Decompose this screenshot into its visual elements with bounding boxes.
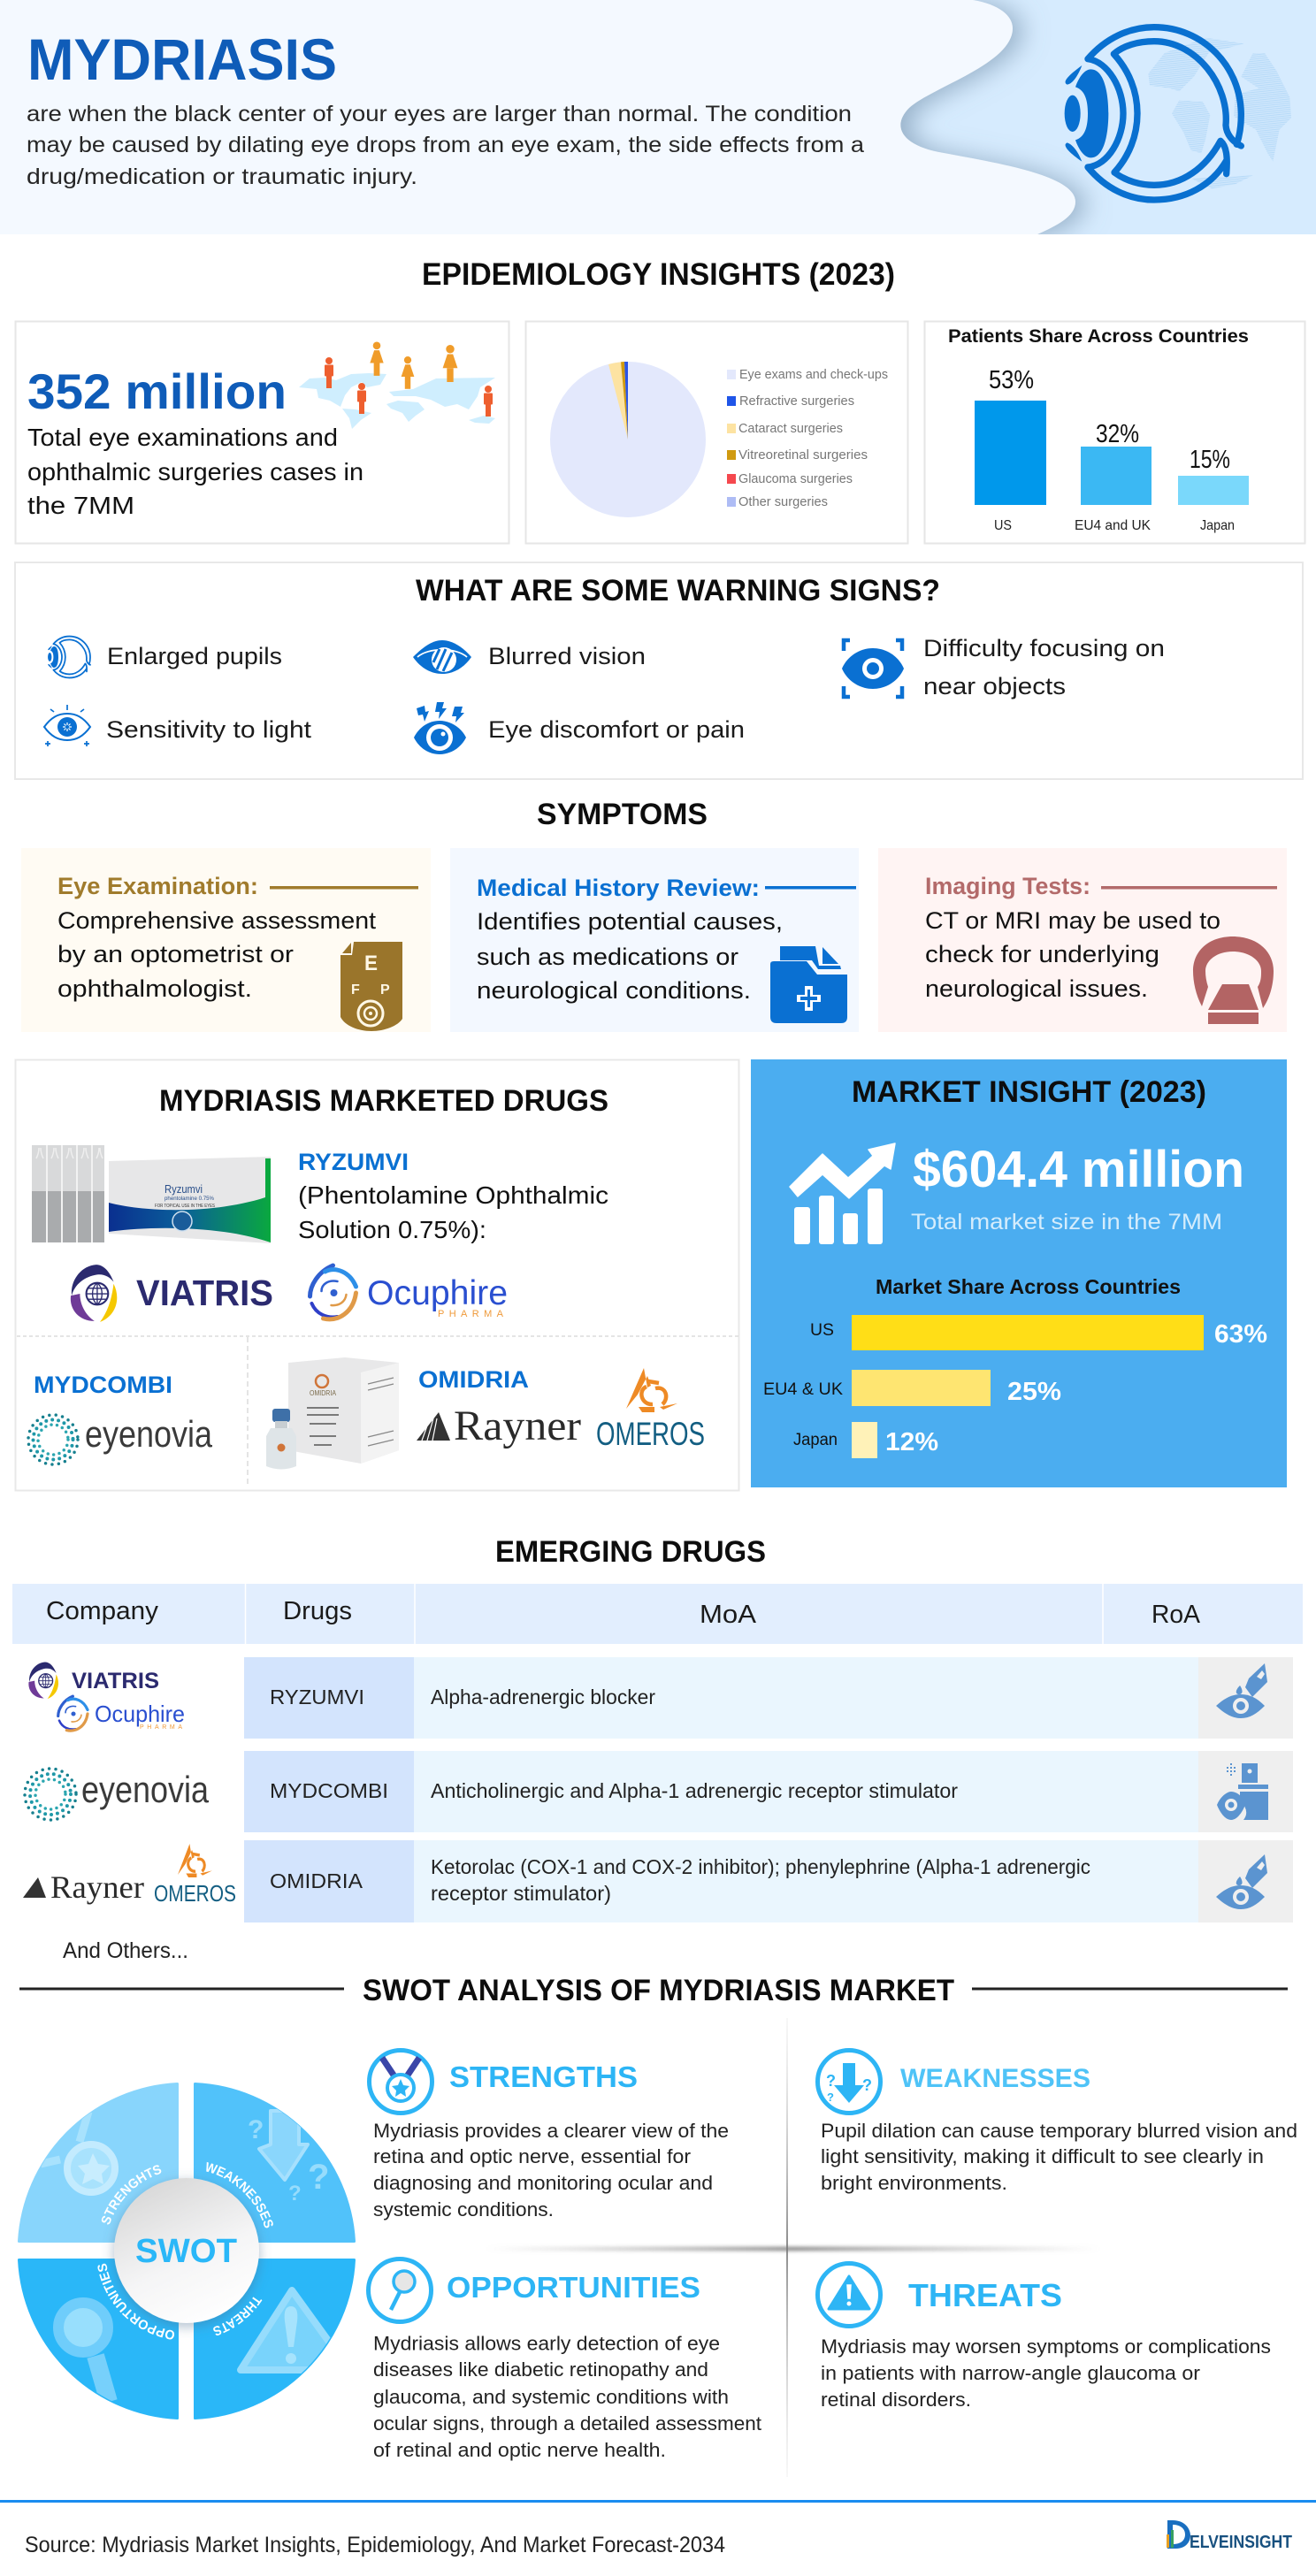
ryzumvi product image: FOR TOPICAL USE IN THE EYES (155, 1204, 216, 1209)
panel: warning signs (15, 562, 1303, 779)
panel: pie chart (525, 322, 907, 543)
panel: market insight (751, 1059, 1287, 1487)
chart: market share: EU4 & UK (763, 1380, 843, 1399)
icon: medal (370, 2050, 432, 2114)
title: MYDRIASIS (27, 27, 337, 92)
label: difficulty focusing (923, 635, 1165, 699)
drug name: omidria: OMIDRIA (418, 1366, 529, 1393)
logo: DelveInsight: ELVEINSIGHT (1190, 2533, 1292, 2552)
intro paragraph: drug/medication or traumatic injury. (27, 164, 417, 189)
icon: eye chart: P (380, 982, 390, 998)
table row: mydcombi (25, 1751, 1293, 1832)
card: imaging tests (878, 848, 1287, 1032)
swot block: threats: in patients with narrow-angle glaucoma or (821, 2362, 1200, 2384)
icon: eye chart: E (364, 952, 378, 975)
table header: Company (46, 1597, 159, 1625)
table row: ryzumvi: Alpha-adrenergic blocker (431, 1685, 655, 1708)
icon: eye chart: F (351, 982, 360, 998)
swot block: weaknesses (817, 2050, 1297, 2194)
table row: ryzumvi (28, 1657, 1293, 1739)
logo: viatris: VIATRIS (136, 1273, 273, 1313)
card: eye examination: Comprehensive assessment (57, 907, 377, 934)
card: medical history review: Medical History Review: (477, 875, 760, 901)
card: imaging tests: Imaging Tests: (925, 873, 1090, 899)
logos: viatris and ocuphire: VIATRIS (72, 1669, 159, 1693)
table row: omidria: receptor stimulator) (431, 1882, 611, 1905)
omidria product image (266, 1357, 399, 1470)
drug name: ryzumvi: RYZUMVI (298, 1149, 409, 1175)
center badge (114, 2178, 259, 2323)
chart: SWOT wheel (18, 2083, 356, 2419)
card: medical history review: neurological conditions. (477, 977, 751, 1004)
table header (12, 1581, 1303, 1644)
ryzumvi product image: Ryzumvi (164, 1182, 203, 1196)
logo: eyenovia: eyenovia (81, 1769, 210, 1810)
icon: eye drop (1216, 1663, 1267, 1718)
swot block: opportunities: glaucoma, and systemic conditions with (373, 2386, 729, 2408)
logo: ocuphire (310, 1265, 508, 1319)
chart: SWOT wheel: ? (308, 2158, 329, 2197)
chart: market share: 25% (1007, 1378, 1061, 1406)
label: difficulty focusing: Difficulty focusing on (923, 635, 1165, 661)
table row: mydcombi: Anticholinergic and Alpha-1 adrenergic receptor stimulator (431, 1779, 958, 1802)
swot block: opportunities: OPPORTUNITIES (447, 2271, 700, 2304)
drug description: Solution 0.75%): (298, 1216, 486, 1243)
label: enlarged pupils: Enlarged pupils (107, 643, 282, 669)
pie legend: Cataract surgeries (738, 422, 843, 436)
table row: ryzumvi: RYZUMVI (270, 1685, 364, 1708)
swot block: strengths: Mydriasis provides a clearer view of the (373, 2120, 729, 2142)
swot block: threats: retinal disorders. (821, 2389, 971, 2411)
center badge: SWOT (135, 2233, 237, 2270)
wheel labels: OPPORTUNITIES (97, 2264, 175, 2340)
pie legend: Refractive surgeries (739, 394, 854, 409)
wheel labels (97, 2161, 273, 2340)
table row: omidria: Ketorolac (COX-1 and COX-2 inhibitor); phenylephrine (Alpha-1 adrenergic (431, 1855, 1090, 1878)
icon: eye with world map (1065, 27, 1291, 200)
table row: mydcombi: MYDCOMBI (270, 1779, 388, 1802)
panel: marketed drugs (16, 1059, 739, 1491)
table header: RoA (1152, 1601, 1201, 1629)
swot block: strengths: diagnosing and monitoring ocular and (373, 2172, 713, 2194)
logos: viatris and ocuphire (28, 1663, 185, 1731)
ryzumvi product image: phentolamine 0.75% (164, 1196, 215, 1202)
logo: omeros (596, 1368, 705, 1452)
swot block: threats: Mydriasis may worsen symptoms or complications (821, 2335, 1271, 2358)
logo: eyenovia (28, 1413, 213, 1464)
panel: patients share bar chart: 15% (1190, 446, 1230, 474)
logo: ocuphire: PHARMA (438, 1309, 504, 1319)
table row: omidria: OMIDRIA (270, 1869, 363, 1892)
heading: marketed drugs: MYDRIASIS MARKETED DRUGS (159, 1084, 608, 1118)
card: medical history review: such as medications or (477, 944, 738, 970)
icon: down arrow: ? (862, 2076, 872, 2094)
swot block: threats: THREATS (908, 2277, 1062, 2313)
panel: 352 million stat: ophthalmic surgeries cases in (27, 458, 363, 485)
icon: growth chart (790, 1143, 895, 1244)
wheel labels: STRENGHTS (101, 2165, 161, 2225)
panel: patients share bar chart: Patients Share Across Countries (948, 326, 1249, 347)
panel: 352 million stat: 352 million (27, 363, 287, 419)
panel: 352 million stat (16, 322, 509, 543)
panel: market insight: Total market size in the 7MM (911, 1210, 1222, 1234)
icon: world map with people (299, 341, 495, 429)
card: medical history review (450, 848, 859, 1032)
icon: down arrow: ? (826, 2072, 836, 2090)
panel: patients share bar chart: 53% (989, 366, 1034, 394)
icon: sensitivity to light (44, 705, 90, 746)
ryzumvi product image (32, 1145, 271, 1243)
swot block: opportunities: diseases like diabetic retinopathy and (373, 2358, 708, 2381)
heading: market insight: MARKET INSIGHT (2023) (852, 1075, 1206, 1109)
logo: rayner: Rayner (454, 1403, 581, 1449)
panel: 352 million stat: the 7MM (27, 492, 134, 519)
icon: down arrow (817, 2050, 881, 2114)
heading: warning signs: WHAT ARE SOME WARNING SIGNS? (416, 574, 940, 608)
logos: rayner and omeros: Rayner (50, 1869, 144, 1905)
icon: magnifier (368, 2259, 432, 2322)
table row: omidria (23, 1840, 1293, 1922)
pie legend: Vitreoretinal surgeries (738, 448, 868, 462)
pie legend (727, 368, 888, 509)
table header: MoA (700, 1601, 757, 1629)
logo: viatris (71, 1265, 273, 1322)
intro paragraph: are when the black center of your eyes are larger than normal. The condition (27, 102, 852, 126)
logos: rayner and omeros: OMEROS (154, 1880, 236, 1907)
swot block: opportunities: ocular signs, through a detailed assessment (373, 2412, 761, 2435)
card: imaging tests: check for underlying (925, 941, 1159, 967)
chart: market share: Market Share Across Countries (876, 1275, 1181, 1298)
card: eye examination: by an optometrist or (57, 941, 294, 967)
chart: SWOT wheel: ? (248, 2115, 264, 2144)
chart: market share: 12% (885, 1428, 938, 1456)
panel: patients share bar chart: Japan (1200, 518, 1235, 533)
swot block: weaknesses: bright environments. (821, 2172, 1007, 2194)
heading: SWOT: SWOT ANALYSIS OF MYDRIASIS MARKET (363, 1974, 954, 2007)
swot block: strengths (370, 2050, 729, 2221)
drug description (298, 1181, 608, 1243)
heading: SWOT (19, 1974, 1288, 2007)
panel: patients share bar chart (925, 322, 1305, 543)
icon: eye chart (340, 942, 402, 1031)
logo: eyenovia: eyenovia (85, 1413, 213, 1455)
logos: viatris and ocuphire: PHARMA (140, 1724, 182, 1731)
icon: warning triangle (817, 2264, 881, 2326)
swot block: strengths: retina and optic nerve, essential for (373, 2145, 691, 2167)
swot block: strengths: systemic conditions. (373, 2198, 554, 2221)
icon: medical folder (770, 946, 847, 1023)
chart: market share (763, 1275, 1267, 1458)
swot block: strengths: STRENGTHS (449, 2060, 638, 2093)
heading: epidemiology: EPIDEMIOLOGY INSIGHTS (2023) (422, 257, 895, 292)
drug description: (Phentolamine Ophthalmic (298, 1181, 608, 1209)
heading: symptoms: SYMPTOMS (537, 798, 708, 831)
swot block: threats (817, 2264, 1271, 2411)
pie legend: Other surgeries (738, 495, 828, 509)
swot block: opportunities: Mydriasis allows early detection of eye (373, 2333, 720, 2354)
logo: DelveInsight (1167, 2520, 1292, 2552)
label: sensitivity to light: Sensitivity to light (106, 716, 312, 743)
chart: market share: US (810, 1321, 834, 1340)
card: medical history review: Identifies potential causes, (477, 908, 783, 935)
icon: down arrow: ? (827, 2091, 834, 2104)
stat: market size: $604.4 million (913, 1141, 1244, 1198)
icon: eye discomfort (414, 702, 466, 754)
source line: Source: Mydriasis Market Insights, Epidemiology, And Market Forecast-2034 (25, 2533, 725, 2557)
header banner (0, 0, 1316, 234)
pie legend: Glaucoma surgeries (738, 472, 853, 486)
pie legend: Eye exams and check-ups (739, 368, 888, 382)
card: eye examination: ophthalmologist. (57, 975, 252, 1002)
icon: nasal spray (1217, 1763, 1268, 1820)
card: eye examination (21, 848, 431, 1032)
logos: viatris and ocuphire: Ocuphire (95, 1701, 185, 1727)
wheel labels: WEAKNESSES (206, 2161, 273, 2228)
icon: enlarged pupils (48, 637, 90, 677)
icon: MRI scanner (1193, 936, 1274, 1024)
logo: eyenovia (25, 1769, 210, 1820)
panel: patients share bar chart: 32% (1096, 420, 1139, 448)
omidria product image: OMIDRIA (310, 1389, 337, 1397)
text: and others: And Others... (63, 1938, 188, 1963)
swot block: opportunities (368, 2259, 761, 2461)
icon: blurred vision (413, 640, 471, 674)
logos: rayner and omeros (23, 1844, 236, 1907)
table header: Drugs (283, 1597, 352, 1625)
intro paragraph: may be caused by dilating eye drops from an eye exam, the side effects from a (27, 133, 864, 157)
chart: SWOT wheel: ? (288, 2182, 302, 2205)
SWOT dividers (486, 2018, 1099, 2477)
swot block: opportunities: of retinal and optic nerve health. (373, 2439, 666, 2461)
heading: emerging drugs: EMERGING DRUGS (495, 1535, 766, 1569)
intro paragraph (27, 102, 864, 189)
panel: patients share bar chart: US (994, 518, 1012, 533)
icon: eye drop (1216, 1854, 1267, 1909)
card: imaging tests: neurological issues. (925, 975, 1148, 1002)
footer rule (0, 2500, 1316, 2503)
label: blurred vision: Blurred vision (488, 643, 646, 669)
panel: patients share bar chart: EU4 and UK (1075, 518, 1151, 533)
swot block: weaknesses: light sensitivity, making it difficult to see clearly in (821, 2145, 1264, 2167)
drug name: mydcombi: MYDCOMBI (34, 1372, 172, 1398)
icon: difficulty focusing (842, 640, 904, 697)
logo: ocuphire: Ocuphire (367, 1274, 508, 1312)
swot block: weaknesses: Pupil dilation can cause temporary blurred vision and (821, 2120, 1297, 2142)
label: difficulty focusing: near objects (923, 673, 1066, 699)
card: imaging tests: CT or MRI may be used to (925, 907, 1220, 934)
logo: omeros: OMEROS (596, 1416, 705, 1452)
chart: market share: Japan (793, 1431, 838, 1449)
label: eye discomfort: Eye discomfort or pain (488, 716, 745, 743)
card: eye examination: Eye Examination: (57, 873, 258, 899)
panel: 352 million stat: Total eye examinations and (27, 424, 338, 451)
chart: market share: 63% (1214, 1320, 1267, 1349)
wheel labels: THREATS (213, 2297, 262, 2335)
swot block: weaknesses: WEAKNESSES (900, 2064, 1090, 2093)
